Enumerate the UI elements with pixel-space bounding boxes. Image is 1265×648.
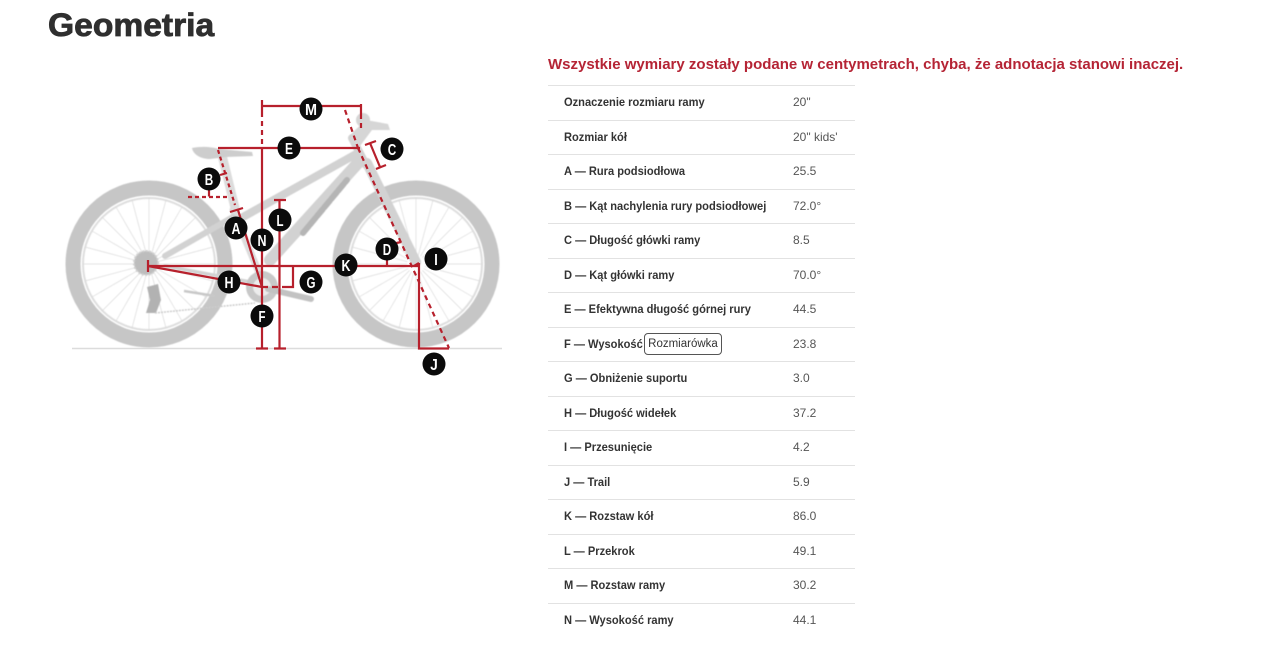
- badge H: H: [224, 275, 234, 292]
- badge L: L: [276, 213, 284, 230]
- badge B: [198, 168, 220, 190]
- bike geometry diagram: [65, 98, 502, 376]
- row: frame size: Oznaczenie rozmiaru ramy: [564, 95, 705, 109]
- badge F: [250, 304, 274, 328]
- row: C: 8.5: [793, 233, 810, 247]
- badge G: [300, 270, 322, 294]
- row: J: J — Trail: [564, 474, 610, 488]
- row: N: N — Wysokość ramy: [564, 612, 674, 626]
- row: wheel size: Rozmiar kół: [564, 130, 627, 144]
- row: M: 30.2: [793, 578, 816, 592]
- row: I: I — Przesunięcie: [564, 440, 652, 454]
- badge N: N: [258, 233, 266, 250]
- frame: [165, 138, 416, 282]
- badge B: B: [205, 172, 213, 189]
- badge N: [250, 228, 274, 252]
- row: H: [548, 396, 855, 430]
- badge H: [218, 270, 240, 294]
- note: units heading: Wszystkie wymiary zostały podane w centymetrach, chyba, że adnotacja stanowi inaczej.: [548, 56, 1183, 73]
- D: head angle: [387, 242, 401, 266]
- badge L: [268, 208, 292, 232]
- row: G: 3.0: [793, 371, 810, 385]
- I and J: [414, 263, 449, 348]
- badge G: G: [306, 275, 316, 292]
- badge C: C: [388, 142, 397, 159]
- row: L: 49.1: [793, 544, 816, 558]
- G: bottom bracket drop: [284, 267, 293, 287]
- badge K: [334, 254, 358, 276]
- L: standover: [274, 200, 286, 348]
- drivetrain: [134, 251, 311, 313]
- row: A: [548, 154, 855, 189]
- badge J: J: [430, 357, 438, 374]
- row: wheel size: 20" kids': [793, 130, 838, 144]
- saddle: [192, 147, 253, 159]
- row: I: [548, 430, 855, 465]
- row: K: [548, 499, 855, 534]
- row: J: [548, 464, 855, 500]
- badge F: F: [258, 309, 266, 326]
- B: seat angle: [188, 150, 235, 205]
- row: A: 25.5: [793, 164, 816, 178]
- bike silhouette: [73, 113, 492, 340]
- row: H: 37.2: [793, 406, 816, 420]
- A: seat tube: [230, 208, 262, 287]
- badge A: [224, 216, 248, 240]
- row: D: 70.0°: [793, 268, 821, 282]
- row: D: [548, 258, 855, 292]
- row: I: 4.2: [793, 440, 810, 454]
- row: N: [548, 602, 855, 638]
- row: F: [548, 326, 855, 362]
- row: frame size: 20": [793, 95, 811, 109]
- row: G: [548, 361, 855, 396]
- row: M: M — Rozstaw ramy: [564, 578, 665, 592]
- row: frame size: [548, 85, 855, 120]
- row: F: F — Wysokość: [564, 336, 643, 350]
- badge D: [376, 238, 398, 260]
- letter badges: [198, 98, 448, 376]
- badge I: I: [434, 252, 438, 269]
- ground line: [72, 348, 502, 350]
- row: A: A — Rura podsiodłowa: [564, 164, 685, 178]
- badge I: [424, 248, 448, 270]
- badge A: A: [232, 221, 241, 238]
- handlebar: [350, 113, 390, 146]
- E: top tube: [218, 147, 360, 149]
- row: B: [548, 188, 855, 224]
- badge M: M: [305, 102, 317, 119]
- badge J: [422, 352, 446, 376]
- row: C: [548, 223, 855, 258]
- row: E: 44.5: [793, 302, 816, 316]
- row: B: B — Kąt nachylenia rury podsiodłowej: [564, 198, 766, 212]
- row: J: 5.9: [793, 474, 810, 488]
- front wheel: [340, 188, 492, 340]
- badge E: E: [285, 141, 293, 158]
- N and F: vertical lines: [256, 148, 268, 348]
- row: H: H — Długość widełek: [564, 406, 676, 420]
- head axis: [358, 148, 449, 348]
- badge D: D: [383, 242, 391, 259]
- M: frame reach: [262, 100, 361, 114]
- badge K: K: [342, 258, 351, 275]
- title: Geometria: [48, 7, 214, 43]
- row: K: 86.0: [793, 509, 816, 523]
- K: wheelbase: [148, 260, 418, 272]
- row: E: E — Efektywna długość górnej rury: [564, 302, 751, 316]
- red measurement lines: [148, 100, 449, 348]
- row: N: 44.1: [793, 612, 816, 626]
- H: chainstay: [148, 266, 262, 287]
- row: D: D — Kąt główki ramy: [564, 268, 674, 282]
- row: L: L — Przekrok: [564, 544, 635, 558]
- badge E: [278, 136, 300, 160]
- row: M: [548, 568, 855, 603]
- row: G: G — Obniżenie suportu: [564, 371, 687, 385]
- row: E: [548, 292, 855, 327]
- rear wheel: [73, 188, 225, 340]
- row: F: 23.8: [793, 336, 816, 350]
- row: C: C — Długość główki ramy: [564, 233, 700, 247]
- badge C: [380, 138, 404, 160]
- badge M: [300, 98, 322, 120]
- row: B: 72.0°: [793, 198, 821, 212]
- row: L: [548, 534, 855, 568]
- geometry table: [548, 85, 855, 626]
- row: wheel size: [548, 120, 855, 154]
- row: K: K — Rozstaw kół: [564, 509, 653, 523]
- C: head tube: [365, 141, 386, 169]
- row: F: Rozmiarówka: [648, 338, 718, 350]
